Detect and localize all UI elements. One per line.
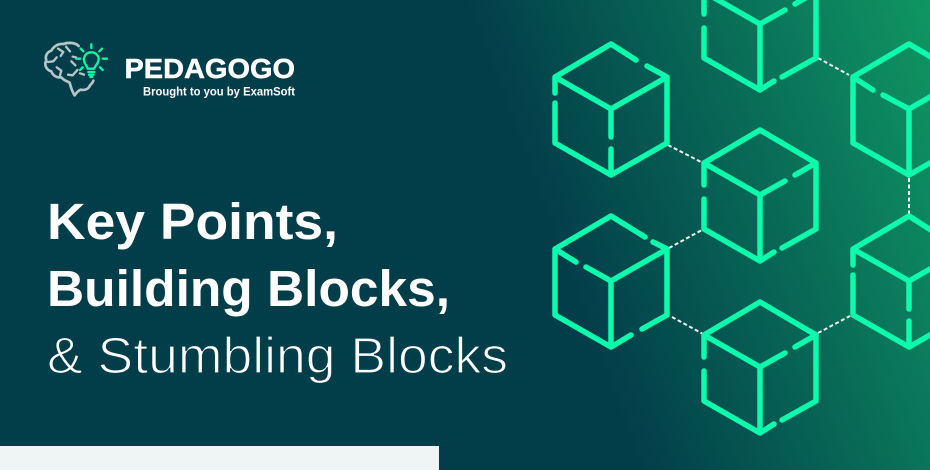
logo bbox=[45, 43, 295, 98]
dashed connectors bbox=[668, 58, 909, 334]
title line 2: Building Blocks, bbox=[47, 260, 450, 317]
cube: lower left bbox=[555, 216, 667, 347]
cube: upper right bbox=[853, 44, 930, 175]
icon: bulb bbox=[84, 52, 99, 69]
title bbox=[47, 193, 508, 384]
cube: upper left bbox=[555, 44, 667, 175]
bottom light bar bbox=[0, 446, 439, 470]
logo tagline: Brought to you by ExamSoft bbox=[143, 86, 295, 98]
title line 3: & Stumbling Blocks bbox=[47, 327, 508, 384]
cube: top centre bbox=[704, 0, 816, 90]
blocks network bbox=[555, 0, 930, 433]
logo wordmark: PEDAGOGO bbox=[124, 53, 295, 84]
title line 1: Key Points, bbox=[47, 193, 338, 250]
cube: lower right bbox=[853, 216, 930, 347]
icon: brain with light bulb bbox=[45, 43, 107, 95]
cube: centre bbox=[704, 130, 816, 261]
cube: bottom centre bbox=[704, 302, 816, 433]
